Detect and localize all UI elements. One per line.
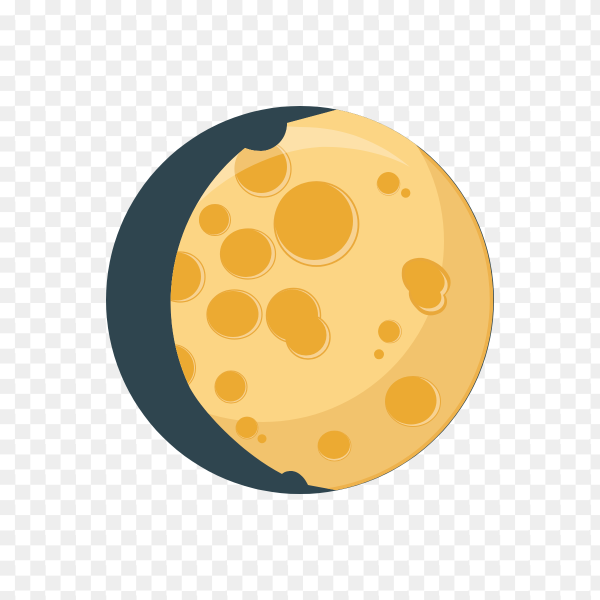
crater: medium upper left	[220, 229, 276, 279]
crater: large	[274, 182, 358, 266]
crater: right tiny	[374, 349, 384, 359]
crater: centre left	[207, 290, 262, 339]
moon edge rim	[326, 110, 494, 490]
crater: double centre	[266, 288, 330, 359]
crater: right small	[378, 320, 402, 343]
moon body	[170, 110, 494, 490]
moon illustration	[106, 106, 494, 494]
crater: bottom tiny	[258, 434, 266, 443]
crater: bottom small	[236, 417, 258, 439]
crater: small upper left	[199, 204, 230, 236]
crater: left cut-off	[170, 251, 206, 303]
highlight band	[196, 126, 409, 205]
crater: upper right tiny	[401, 188, 410, 198]
crater: double right	[402, 258, 451, 315]
crater: top	[235, 141, 291, 197]
lit disc	[170, 110, 444, 422]
crater: lower right	[386, 376, 440, 426]
crater: lower left small	[215, 371, 247, 403]
shaded moon base	[170, 110, 493, 490]
crater: bottom	[318, 431, 351, 461]
dark shadow disc	[106, 106, 494, 494]
crater: upper right small	[377, 172, 400, 196]
crater: lower left cut-off	[175, 344, 196, 386]
